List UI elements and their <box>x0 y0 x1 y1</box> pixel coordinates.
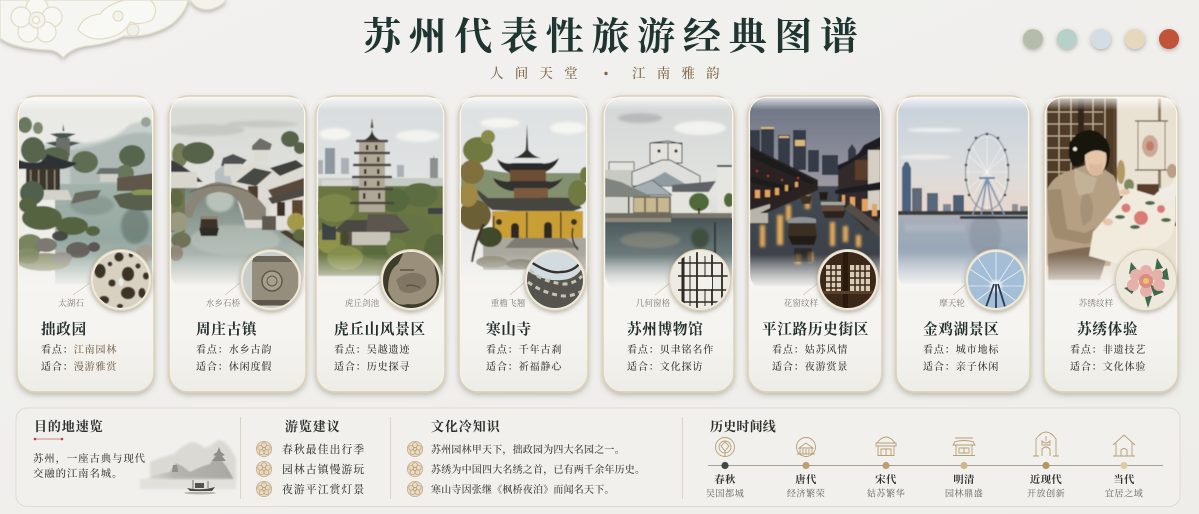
tip 3: 夜游平江赏灯景 <box>282 482 365 496</box>
caption: 几何窗格: 几何窗格 <box>636 297 671 308</box>
stage: 宋代 <box>867 437 905 498</box>
panel: cultural facts <box>407 419 645 497</box>
fact 1 <box>407 441 625 457</box>
divider: facts and timeline <box>682 417 684 499</box>
caption: 太湖石: 太湖石 <box>58 297 84 308</box>
stage: 春秋 <box>706 438 744 498</box>
suitability: 平江路历史街区: 适合：夜游赏景 <box>772 360 848 373</box>
panel: card 平江路历史街区 <box>748 96 882 392</box>
fact 2: 苏绣为中国四大名绣之首，已有两千余年历史。 <box>431 463 645 476</box>
panel: card 拙政园 <box>14 96 155 392</box>
caption: 水乡石桥: 水乡石桥 <box>206 297 241 308</box>
red accent divider <box>34 438 63 440</box>
subtitle: 江南雅韵 <box>632 65 731 81</box>
info: 周庄古镇: 看点：水乡古韵 <box>196 343 272 356</box>
destination description <box>33 452 146 480</box>
medallion: 苏绣纹样 <box>1115 250 1177 312</box>
caption: 虎丘剑池: 虎丘剑池 <box>345 297 380 308</box>
divider: tips and facts <box>390 417 392 499</box>
image: Hanshan temple <box>461 98 586 270</box>
info: 苏绣体验: 看点：非遗技艺 <box>1070 343 1146 356</box>
info: 苏州博物馆: 看点：贝聿铭名作 <box>627 343 714 356</box>
medallion: 水乡石桥 <box>240 250 302 312</box>
stage: 近现代: 开放创新 <box>1027 488 1065 498</box>
title: 金鸡湖景区: 金鸡湖景区 <box>923 320 999 338</box>
stage: 宋代: 姑苏繁华 <box>867 488 905 498</box>
stage: 近现代 <box>1027 432 1065 498</box>
subtitle <box>490 65 731 81</box>
title: 苏绣体验: 苏绣体验 <box>1077 320 1138 338</box>
destination description: 交融的江南名城。 <box>33 467 123 480</box>
stage: 春秋: 春秋 <box>714 473 736 486</box>
leader line <box>510 282 525 295</box>
stage: 唐代 <box>787 438 825 498</box>
decorative auspicious cloud ornament <box>0 0 226 58</box>
destination description: 苏州，一座古典与现代 <box>33 452 146 465</box>
tip 1: 春秋最佳出行季 <box>282 442 365 456</box>
caption: 苏绣纹样: 苏绣纹样 <box>1079 297 1114 308</box>
image: garden pond <box>19 102 152 284</box>
stage: 春秋: 吴国都城 <box>706 488 744 498</box>
image: Pingjiang Road at night <box>748 96 882 286</box>
panel: card 周庄古镇 <box>165 96 307 392</box>
suitability: 虎丘山风景区: 适合：历史探寻 <box>334 360 410 373</box>
title: 虎丘山风景区: 虎丘山风景区 <box>334 320 426 338</box>
suitability: 拙政园: 适合：漫游雅赏 <box>41 360 117 373</box>
leader line <box>953 284 966 295</box>
timeline axis <box>708 464 1163 466</box>
suitability: 苏州博物馆: 适合：文化探访 <box>627 360 703 373</box>
title: 平江路历史街区: 平江路历史街区 <box>762 320 869 338</box>
leader line <box>803 284 817 295</box>
panel: card 苏州博物馆 <box>603 96 734 392</box>
panel: travel tips <box>256 419 365 497</box>
leader line <box>1098 284 1114 295</box>
fact 3 <box>407 481 615 497</box>
leader line <box>364 282 380 295</box>
title: 周庄古镇: 周庄古镇 <box>196 320 259 338</box>
panel: card 金鸡湖景区 <box>896 96 1030 392</box>
heading: 游览建议: 游览建议 <box>285 419 341 434</box>
heading: 目的地速览: 目的地速览 <box>34 419 104 434</box>
stage: 当代: 当代 <box>1113 473 1135 486</box>
stage: 唐代: 唐代 <box>795 473 817 486</box>
stage: 宋代: 宋代 <box>875 473 897 486</box>
title: 苏州博物馆: 苏州博物馆 <box>627 320 703 338</box>
heading: 历史时间线: 历史时间线 <box>710 419 776 434</box>
caption: 花窗纹样: 花窗纹样 <box>784 297 819 308</box>
divider: overview and tips <box>240 417 242 499</box>
image: Tiger Hill pagoda <box>318 98 443 276</box>
suitability: 寒山寺: 适合：祈福静心 <box>486 360 562 373</box>
stage: 明清 <box>945 438 983 498</box>
stage: 当代 <box>1105 435 1143 498</box>
fact 1: 苏州园林甲天下，拙政园为四大名园之一。 <box>431 443 625 456</box>
stage: 近现代: 近现代 <box>1030 473 1062 486</box>
tip 2: 园林古镇慢游玩 <box>282 462 365 476</box>
info: 平江路历史街区: 看点：姑苏风情 <box>772 343 848 356</box>
suitability: 周庄古镇: 适合：休闲度假 <box>196 360 272 373</box>
info: 寒山寺: 看点：千年古刹 <box>486 343 562 356</box>
title: 寒山寺: 寒山寺 <box>486 320 532 338</box>
stage: 当代: 宜居之域 <box>1105 488 1143 498</box>
medallion: 摩天轮 <box>965 250 1027 312</box>
heading: 文化冷知识: 文化冷知识 <box>431 419 501 434</box>
leader line <box>655 283 670 295</box>
panel: card 寒山寺 <box>458 96 590 392</box>
colour palette dots <box>1023 29 1179 49</box>
image: Jinji Lake ferris wheel <box>896 96 1030 284</box>
panel: destination overview <box>33 419 236 494</box>
info: 金鸡湖景区: 看点：城市地标 <box>923 343 999 356</box>
medallion: 重檐飞翘 <box>524 250 586 312</box>
fact 3: 寒山寺因张继《枫桥夜泊》而闻名天下。 <box>431 483 615 496</box>
suitability: 苏绣体验: 适合：文化体验 <box>1070 360 1146 373</box>
caption: 摩天轮: 摩天轮 <box>939 297 965 308</box>
image: water town <box>171 98 304 284</box>
stage: 明清: 明清 <box>953 473 975 486</box>
panel: card 苏绣体验 <box>1044 96 1178 392</box>
info: 拙政园: 看点：江南园林 <box>41 343 117 356</box>
image: Suzhou embroidery artisan <box>1044 96 1178 290</box>
fact 2 <box>407 461 645 477</box>
panel: bottom information strip <box>16 408 1180 506</box>
leader line <box>225 283 240 295</box>
image: Suzhou Museum <box>603 96 734 290</box>
subtitle: 人间天堂 <box>490 65 589 81</box>
title: 苏州代表性旅游经典图谱 <box>363 16 866 58</box>
medallion: 花窗纹样 <box>817 250 879 312</box>
medallion: 虎丘剑池 <box>380 250 442 312</box>
stage: 明清: 园林鼎盛 <box>945 488 983 498</box>
panel: history timeline <box>706 419 1163 498</box>
ink wash landscape <box>140 440 236 494</box>
medallion: 太湖石 <box>90 250 152 312</box>
medallion: 几何窗格 <box>669 250 731 312</box>
caption: 重檐飞翘: 重檐飞翘 <box>491 297 526 308</box>
info: 虎丘山风景区: 看点：吴越遗迹 <box>334 343 410 356</box>
title: 拙政园: 拙政园 <box>41 320 87 338</box>
stage: 唐代: 经济繁荣 <box>787 488 825 498</box>
leader line <box>73 283 90 295</box>
panel: card 虎丘山风景区 <box>315 96 452 392</box>
suitability: 金鸡湖景区: 适合：亲子休闲 <box>923 360 999 373</box>
